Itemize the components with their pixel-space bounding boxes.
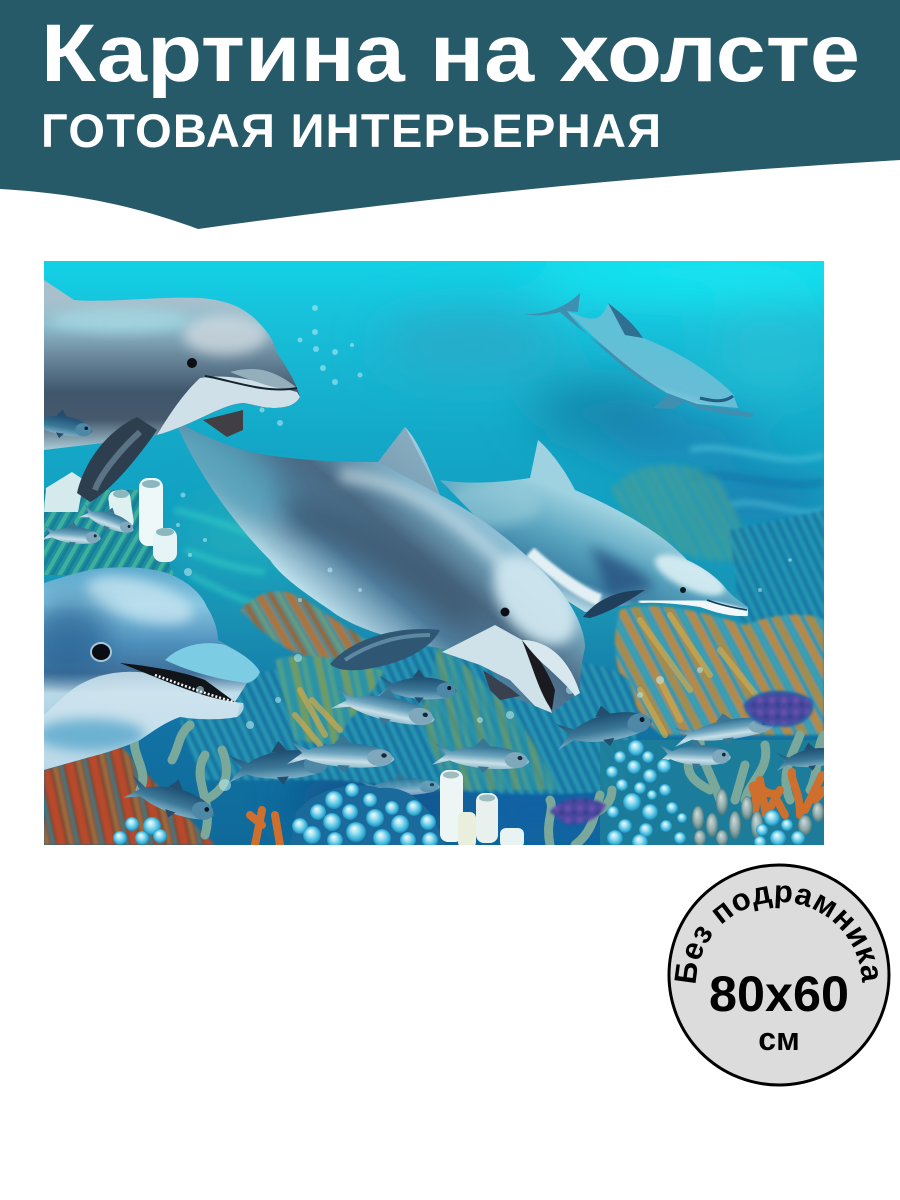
badge curved caption: Без подрамника <box>674 885 878 983</box>
dark patch <box>590 545 655 596</box>
dolphin: distant top right <box>523 293 755 417</box>
air bubbles <box>176 305 792 791</box>
water background <box>44 261 824 845</box>
seaweed: orange centre <box>240 591 380 660</box>
water waves <box>690 448 824 512</box>
flipper <box>583 590 645 618</box>
header banner <box>0 0 900 229</box>
seaweed: bottom left red <box>44 745 215 845</box>
upper beak <box>165 643 260 683</box>
fish school <box>24 403 844 831</box>
grey bubble coral <box>692 789 824 846</box>
badge unit: см <box>758 1021 800 1057</box>
flipper <box>77 417 157 502</box>
forehead highlight <box>82 566 198 634</box>
blue water texture <box>180 648 637 794</box>
blue bubble coral: bottom left <box>113 817 167 845</box>
white tube coral bottom <box>440 770 524 848</box>
under jaw pouch <box>483 670 520 700</box>
eye <box>91 643 111 661</box>
seaweed: green centre bottom <box>420 640 560 790</box>
purple coral <box>550 692 812 824</box>
mouth <box>120 663 235 702</box>
under fin <box>203 410 243 437</box>
lower jaw <box>442 625 552 713</box>
blue bubble coral: bottom right <box>754 810 805 848</box>
seaweed: teal upper left <box>44 490 174 576</box>
seaweed: orange coral bottom <box>250 772 824 845</box>
painting: dolphins underwater <box>44 261 824 845</box>
seaweed: olive lower right <box>615 606 824 735</box>
badge: size <box>668 864 890 1086</box>
head highlight <box>486 550 582 652</box>
fin shade <box>378 427 440 495</box>
dolphin: large centre <box>178 426 585 713</box>
dark flank <box>290 510 470 620</box>
dolphin: lower left <box>30 566 260 770</box>
upper beak <box>522 640 580 696</box>
seaweed: green coral branches <box>134 725 824 845</box>
seaweed: green upper right <box>610 464 760 562</box>
blue bubble coral: centre right <box>606 740 687 850</box>
tail fade <box>178 426 288 536</box>
eye <box>500 608 510 616</box>
subtitle: ГОТОВАЯ ИНТЕРЬЕРНАЯ <box>41 104 661 157</box>
eye <box>187 358 197 368</box>
seaweed: green centre <box>275 656 385 745</box>
flipper <box>330 629 440 670</box>
blue bubble coral: centre left <box>290 783 445 848</box>
lower jaw <box>44 672 240 770</box>
white tube coral left <box>44 472 177 562</box>
mouth <box>522 640 555 710</box>
light bands <box>174 507 266 605</box>
dolphin: right centre <box>440 440 748 618</box>
side shade <box>30 600 110 680</box>
badge circle <box>669 865 889 1085</box>
title: Картина на холсте <box>41 8 860 99</box>
seaweed: blue right streaks <box>730 510 824 622</box>
back highlight <box>340 475 510 570</box>
deep water lower right <box>600 740 824 845</box>
golden weed <box>295 615 760 745</box>
badge size: 80x60 <box>709 966 849 1022</box>
belly stripe <box>530 552 600 600</box>
dolphin: top left <box>44 280 300 502</box>
